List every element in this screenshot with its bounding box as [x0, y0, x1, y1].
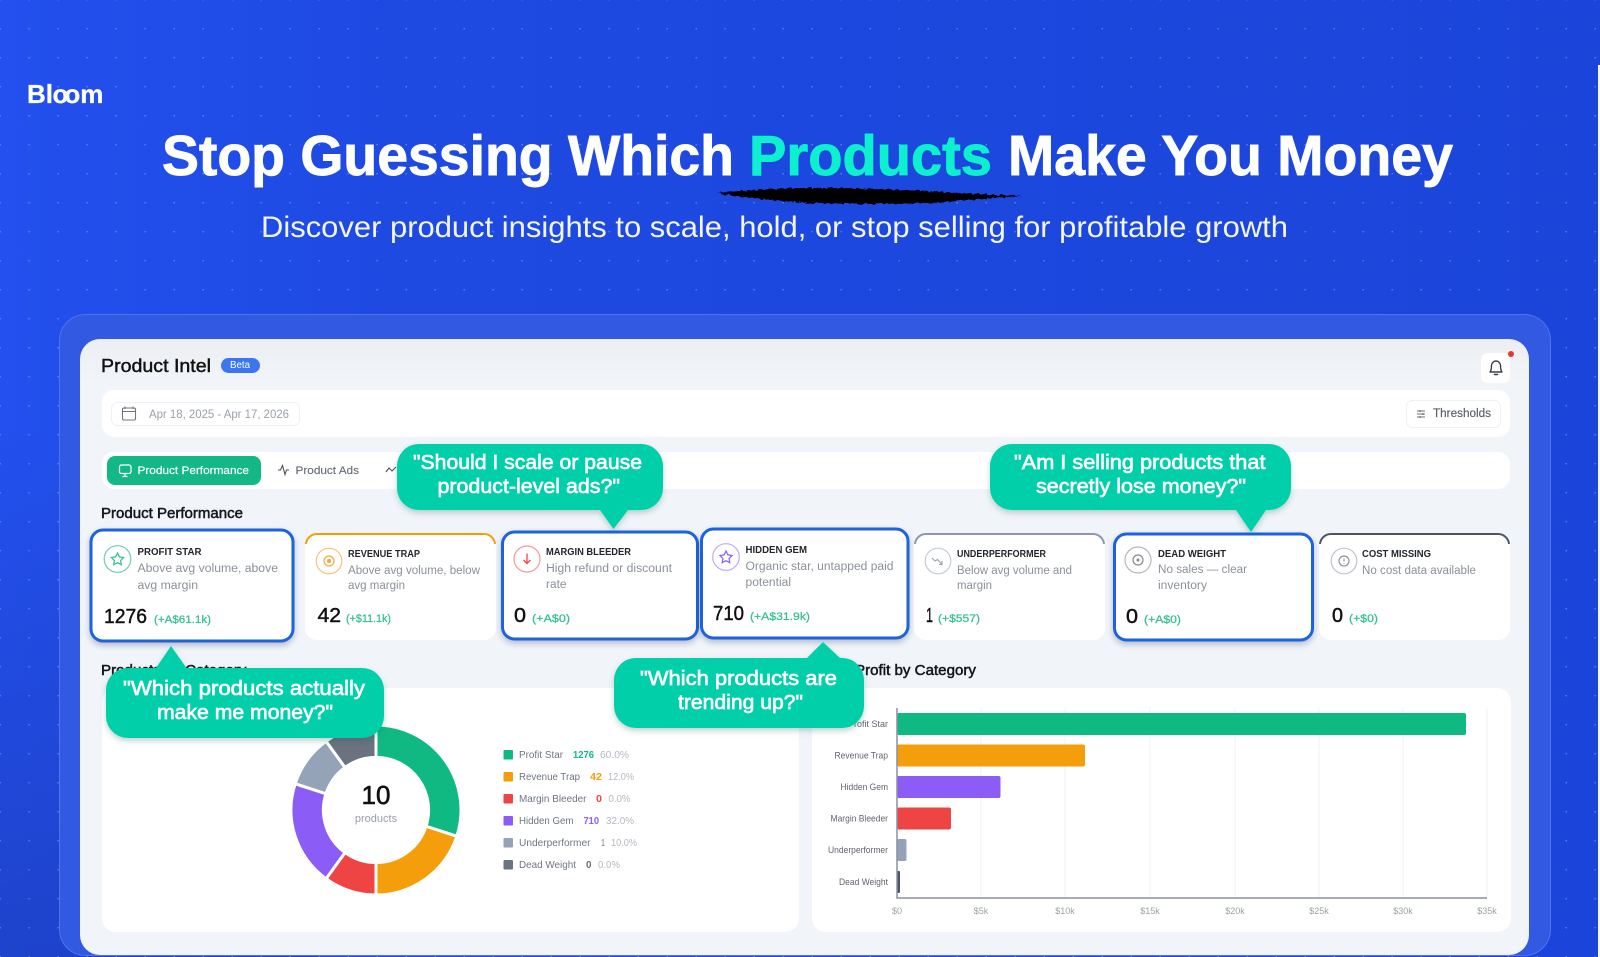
card: underperformer: Below avg volume and	[957, 565, 1072, 577]
donut legend: Dead Weight	[519, 860, 576, 871]
donut legend: 1276	[573, 750, 594, 761]
card: margin bleeder: MARGIN BLEEDER	[546, 547, 632, 558]
date bar: Thresholds	[1433, 408, 1491, 420]
card: cost missing	[1319, 533, 1510, 640]
card: dead weight: DEAD WEIGHT	[1158, 549, 1226, 560]
card: profit star: PROFIT STAR	[138, 547, 202, 558]
y axis labels: Underperformer	[828, 845, 888, 856]
card: cost missing: No cost data available	[1362, 565, 1476, 577]
callout: secretly lose money: secretly lose money?"	[1036, 475, 1246, 498]
x axis labels: $35k	[1477, 906, 1497, 916]
card: hidden gem	[702, 529, 908, 638]
y axis labels: Hidden Gem	[840, 782, 888, 793]
title: Products	[749, 124, 992, 188]
donut legend: 10.0%	[611, 838, 637, 849]
subtitle: Discover product insights to scale, hold, or stop selling for profitable growth	[261, 211, 1288, 244]
logo: Bloom	[27, 79, 103, 109]
donut legend: 0	[586, 860, 592, 871]
donut legend: 60.0%	[600, 750, 629, 761]
donut legend: Hidden Gem	[519, 816, 574, 827]
x axis labels: $20k	[1225, 906, 1245, 916]
callout: trending up: "Which products are	[640, 667, 837, 690]
donut legend: Profit Star	[519, 750, 564, 761]
callout: make me money	[106, 646, 384, 738]
card: profit star: Above avg volume, above	[138, 563, 278, 575]
card: dead weight: No sales — clear	[1158, 564, 1247, 576]
y axis labels: Margin Bleeder	[830, 814, 888, 824]
card: underperformer: margin	[957, 580, 992, 592]
date bar	[102, 390, 1510, 437]
donut legend: 1	[601, 838, 605, 849]
callout: make me money: make me money?"	[157, 701, 333, 724]
chart axes	[897, 708, 1487, 898]
donut legend: 32.0%	[606, 816, 634, 827]
callout: trending up	[614, 642, 864, 728]
card: hidden gem: HIDDEN GEM	[746, 545, 807, 556]
donut legend: 42	[590, 772, 602, 783]
donut chart	[291, 725, 461, 895]
card: dead weight: (+A$0)	[1144, 614, 1181, 626]
donut legend: 12.0%	[608, 772, 634, 783]
card: margin bleeder: (+A$0)	[532, 613, 570, 625]
panel: bar chart	[812, 688, 1511, 932]
card: underperformer	[914, 533, 1105, 640]
page heading	[101, 356, 260, 376]
date bar: Apr 18, 2025 - Apr 17, 2026	[149, 409, 289, 421]
donut legend	[504, 750, 637, 871]
x axis labels: $0	[892, 906, 902, 916]
card: profit star	[91, 530, 293, 641]
notification bell	[1481, 351, 1514, 383]
title	[162, 124, 1453, 188]
card: hidden gem: (+A$31.9k)	[750, 611, 810, 623]
callout: scale or pause: product-level ads?"	[438, 475, 620, 498]
donut centre total	[355, 780, 398, 825]
callout: secretly lose money: "Am I selling products that	[1014, 451, 1266, 474]
brush underline	[717, 188, 1022, 204]
card: underperformer: 1	[926, 605, 933, 627]
bars	[897, 713, 1466, 893]
card: revenue trap	[305, 533, 496, 640]
donut legend: Underperformer	[519, 838, 591, 849]
card: underperformer: UNDERPERFORMER	[957, 549, 1047, 560]
section heading: profit by category: Profit by Category	[855, 663, 977, 679]
donut centre total: products	[355, 813, 398, 825]
card: margin bleeder: High refund or discount	[546, 563, 673, 575]
card: profit star: avg margin	[138, 580, 198, 592]
card: revenue trap: (+$11.1k)	[346, 613, 391, 625]
x axis labels: $25k	[1309, 906, 1329, 916]
donut legend: Margin Bleeder	[519, 794, 587, 805]
title: Make You Money	[1008, 124, 1453, 188]
card: margin bleeder	[502, 532, 698, 639]
donut legend: Revenue Trap	[519, 772, 580, 783]
x axis labels	[892, 906, 1497, 916]
card: hidden gem: potential	[746, 577, 791, 589]
donut legend: 710	[584, 816, 599, 827]
dashboard panel	[80, 339, 1529, 955]
card: cost missing: (+$0)	[1349, 613, 1378, 625]
callout: make me money: "Which products actually	[123, 677, 366, 700]
section heading: product performance: Product Performance	[101, 506, 243, 522]
callout: scale or pause	[397, 444, 663, 529]
donut legend: 0.0%	[608, 794, 631, 805]
card: cost missing: 0	[1332, 605, 1343, 627]
card: hidden gem: Organic star, untapped paid	[746, 561, 894, 573]
card: underperformer: (+$557)	[938, 613, 980, 625]
callout: scale or pause: "Should I scale or pause	[413, 451, 642, 474]
y axis labels: Revenue Trap	[834, 750, 888, 762]
card: profit star: (+A$61.1k)	[154, 614, 211, 626]
donut centre total: 10	[362, 780, 390, 810]
donut legend: 0	[596, 794, 602, 805]
card: dead weight	[1114, 534, 1312, 640]
x axis labels: $30k	[1393, 906, 1413, 916]
card: dead weight: inventory	[1158, 580, 1207, 592]
page heading: Product Intel	[101, 356, 211, 376]
card: revenue trap: Above avg volume, below	[348, 565, 481, 577]
card: profit star: 1276	[104, 606, 147, 628]
y axis labels: Profit Star	[848, 719, 888, 730]
y axis labels: Dead Weight	[839, 877, 888, 888]
outer frame	[60, 314, 1550, 956]
card: margin bleeder: rate	[546, 579, 566, 591]
x axis labels: $15k	[1140, 906, 1160, 916]
card: dead weight: 0	[1126, 606, 1138, 628]
tab bar	[102, 452, 1510, 489]
callout: trending up: trending up?"	[678, 691, 803, 714]
section heading: products by category: Products by Category	[101, 663, 247, 679]
y axis labels	[828, 719, 888, 888]
page heading: Beta	[230, 360, 250, 371]
card: margin bleeder: 0	[514, 605, 526, 627]
x axis labels: $10k	[1055, 906, 1075, 916]
title: Stop Guessing Which	[162, 124, 734, 188]
x axis labels: $5k	[974, 906, 989, 916]
donut legend: 0.0%	[598, 860, 620, 871]
card: revenue trap: REVENUE TRAP	[348, 549, 420, 560]
card: hidden gem: 710	[713, 603, 744, 625]
card: revenue trap: avg margin	[348, 580, 405, 592]
callout: secretly lose money	[990, 444, 1291, 532]
tab bar: Product Performance	[138, 465, 249, 477]
panel: donut chart	[102, 688, 799, 932]
card: revenue trap: 42	[318, 605, 341, 627]
tab bar: Product Ads	[296, 465, 360, 477]
card: cost missing: COST MISSING	[1362, 549, 1431, 560]
